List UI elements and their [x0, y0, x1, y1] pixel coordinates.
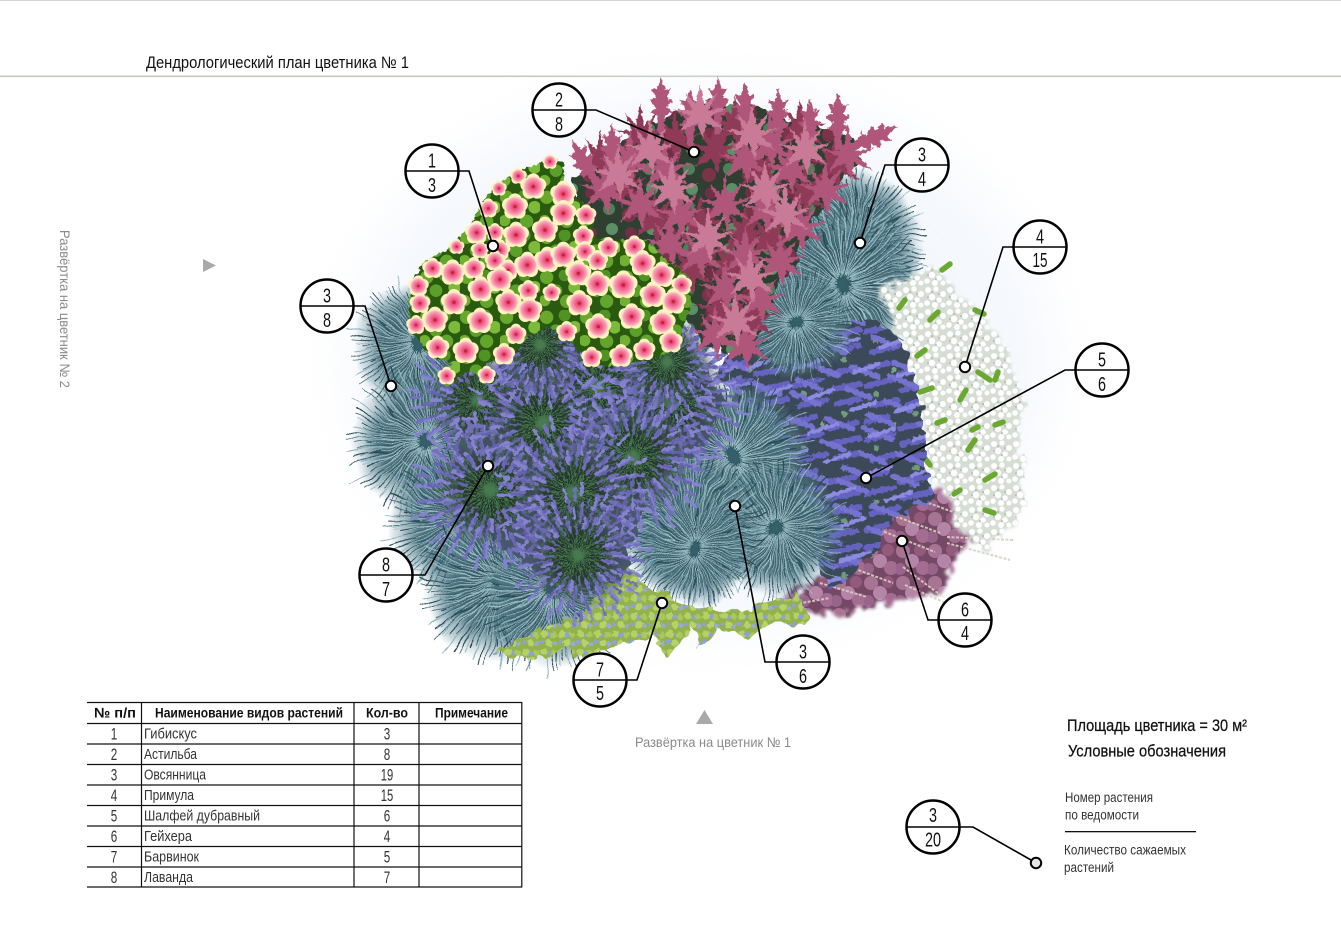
table rows: 5 — [111, 806, 117, 826]
plant: fescue outer tufts — [253, 86, 1037, 779]
legend symbol 3/20: 3 — [929, 805, 937, 827]
callout 3/6 fescue: 3 — [799, 642, 807, 664]
legend symbol 3/20 — [906, 800, 1041, 868]
callout 4/15 primula: 15 — [1032, 250, 1048, 272]
plant: periwinkle groundcover — [492, 566, 810, 660]
callout 7/5 periwinkle — [574, 598, 667, 706]
table rows: 5 — [384, 848, 390, 866]
callout 1/3 hibiscus: 1 — [428, 150, 436, 172]
table rows: Овсянница — [144, 766, 207, 784]
callout 8/7 lavender: 7 — [382, 579, 390, 601]
legend divider — [1065, 831, 1196, 832]
legend text: quantity: растений — [1064, 860, 1114, 875]
soft haze behind plants — [350, 90, 1050, 630]
callout 3/4 fescue — [855, 138, 948, 248]
callout 5/6 salvia: 5 — [1098, 350, 1106, 372]
table rows: 7 — [111, 848, 117, 866]
plant: heuchera — [781, 462, 1013, 620]
area text: Площадь цветника = 30 м² — [1067, 716, 1247, 735]
callout 2/8 astilbe: 8 — [555, 114, 563, 136]
plant: hibiscus — [400, 147, 700, 390]
table rows: 4 — [384, 827, 390, 846]
legend heading: Условные обозначения — [1068, 742, 1226, 760]
callout 1/3 hibiscus — [405, 144, 498, 251]
callout 3/6 fescue: 6 — [799, 666, 807, 688]
table header: Наименование видов растений — [155, 704, 343, 720]
table rows: 4 — [111, 786, 117, 805]
header rule — [0, 76, 1341, 77]
callout 6/4 heuchera — [897, 536, 992, 646]
table rows: 8 — [384, 745, 390, 764]
table rows: 7 — [384, 868, 390, 887]
legend text: quantity: Количество сажаемых — [1064, 842, 1186, 858]
table rows: Гейхера — [144, 828, 193, 845]
callout 8/7 lavender — [360, 461, 493, 602]
callout 6/4 heuchera: 4 — [961, 623, 969, 645]
callout 1/3 hibiscus: 3 — [428, 175, 436, 197]
plant: primula — [876, 261, 1028, 554]
callout 5/6 salvia: 6 — [1098, 374, 1106, 396]
callout 3/8 fescue: 8 — [323, 310, 331, 332]
callout 3/8 fescue: 3 — [323, 286, 331, 308]
legend text: plant number: по ведомости — [1065, 808, 1139, 822]
table rows: Шалфей дубравный — [144, 808, 260, 824]
table rows: 8 — [111, 868, 117, 887]
legend text: plant number — [1065, 790, 1153, 822]
legend text: quantity — [1064, 842, 1186, 875]
side arrow — [203, 259, 216, 272]
callout 3/8 fescue — [300, 280, 396, 391]
table rows: 15 — [381, 786, 393, 805]
callout 2/8 astilbe — [532, 84, 699, 157]
table grid — [87, 702, 522, 888]
table rows: Гибискус — [144, 726, 197, 742]
callout 3/4 fescue: 4 — [918, 169, 926, 191]
legend symbol 3/20: 20 — [925, 830, 941, 852]
plant: oak sage salvia — [718, 319, 936, 590]
callout 6/4 heuchera: 6 — [961, 600, 969, 622]
bottom arrow — [696, 710, 713, 724]
table rows: 1 — [111, 724, 117, 744]
table rows — [111, 724, 393, 887]
title: Дендрологический план цветника № 1 — [146, 54, 409, 72]
table header: Примечание — [435, 704, 508, 720]
table rows: 3 — [111, 766, 117, 784]
bottom label: view to flowerbed 1: Развёртка на цветник № 1 — [635, 734, 791, 750]
callouts — [300, 84, 1128, 706]
callout 4/15 primula: 4 — [1036, 226, 1044, 248]
top border line — [0, 0, 1341, 1]
plant: lavender — [329, 215, 848, 713]
lavender dark base — [450, 340, 725, 590]
table rows: Примула — [144, 787, 195, 804]
table rows: 6 — [111, 827, 117, 846]
callout 2/8 astilbe: 2 — [555, 90, 563, 112]
table rows: Лаванда — [144, 869, 194, 886]
table rows: 3 — [384, 724, 390, 744]
callout 7/5 periwinkle: 5 — [596, 683, 604, 705]
planting plan illustration — [253, 76, 1050, 779]
table header — [94, 704, 508, 720]
side label: view to flowerbed 2: Развёртка на цветник № 2 — [57, 230, 73, 388]
callout 8/7 lavender: 8 — [382, 554, 390, 576]
callout 3/6 fescue — [730, 501, 830, 688]
plant: fescue central tufts — [508, 211, 942, 707]
table header: № п/п — [94, 704, 136, 720]
table rows: 2 — [111, 745, 117, 764]
callout 3/4 fescue: 3 — [918, 144, 926, 166]
table rows: Барвинок — [144, 848, 199, 866]
table rows: Астильба — [144, 746, 198, 763]
plant table — [87, 702, 522, 888]
table header: Кол-во — [366, 704, 408, 720]
callout 5/6 salvia — [861, 344, 1128, 483]
callout 4/15 primula — [960, 220, 1066, 372]
legend text: plant number: Номер растения — [1065, 790, 1153, 805]
table rows: 19 — [381, 766, 393, 784]
lavender tufts — [329, 215, 848, 713]
legend — [906, 790, 1196, 875]
table rows: 6 — [384, 806, 390, 826]
callout 7/5 periwinkle: 7 — [596, 660, 604, 682]
plant: astilbe — [560, 76, 903, 370]
